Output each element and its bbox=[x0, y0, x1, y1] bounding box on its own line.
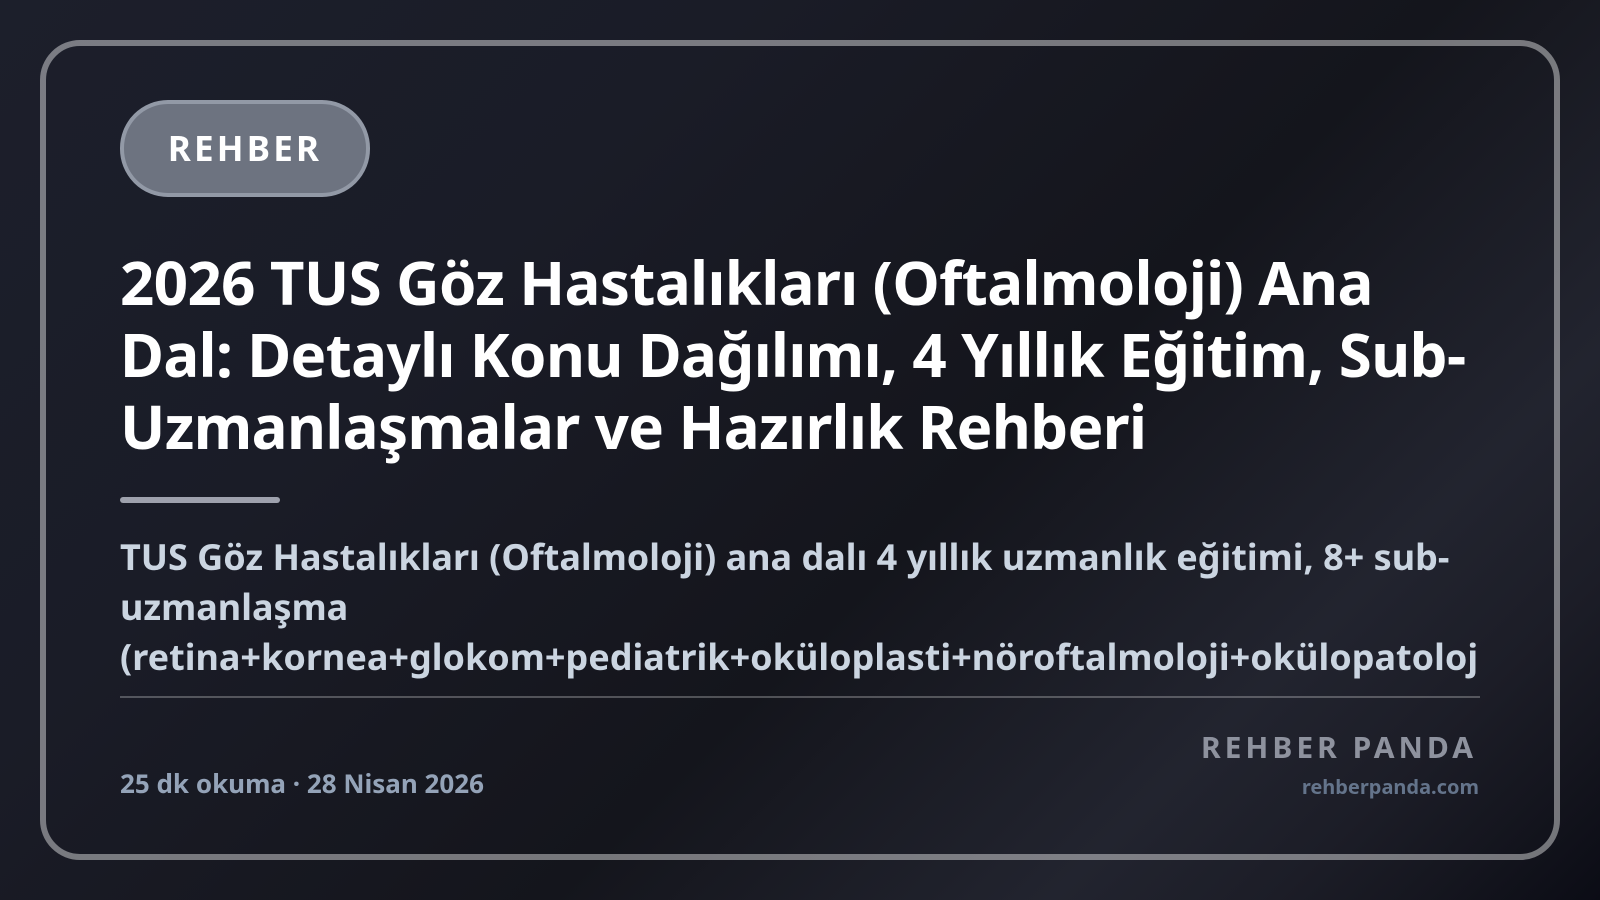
title bbox=[120, 241, 1466, 467]
badge: REHBER: REHBER bbox=[168, 125, 322, 172]
brand name: REHBER PANDA bbox=[1201, 726, 1477, 767]
reading time and date: 25 dk okuma · 28 Nisan 2026 bbox=[120, 765, 484, 801]
badge: REHBER bbox=[120, 100, 370, 197]
subtitle: uzmanlaşma bbox=[120, 582, 348, 631]
footer divider bbox=[120, 696, 1480, 698]
title: 2026 TUS Göz Hastalıkları (Oftalmoloji) Ana bbox=[120, 241, 1373, 323]
subtitle: TUS Göz Hastalıkları (Oftalmoloji) ana dalı 4 yıllık uzmanlık eğitimi, 8+ sub- bbox=[120, 532, 1449, 581]
website: rehberpanda.com bbox=[1302, 773, 1479, 800]
subtitle bbox=[120, 532, 1480, 681]
accent rule bbox=[120, 497, 280, 503]
title: Uzmanlaşmalar ve Hazırlık Rehberi bbox=[120, 385, 1146, 467]
title: Dal: Detaylı Konu Dağılımı, 4 Yıllık Eğitim, Sub- bbox=[120, 313, 1466, 395]
subtitle: (retina+kornea+glokom+pediatrik+oküloplasti+nöroftalmoloji+okülopatoloji bbox=[120, 632, 1480, 681]
